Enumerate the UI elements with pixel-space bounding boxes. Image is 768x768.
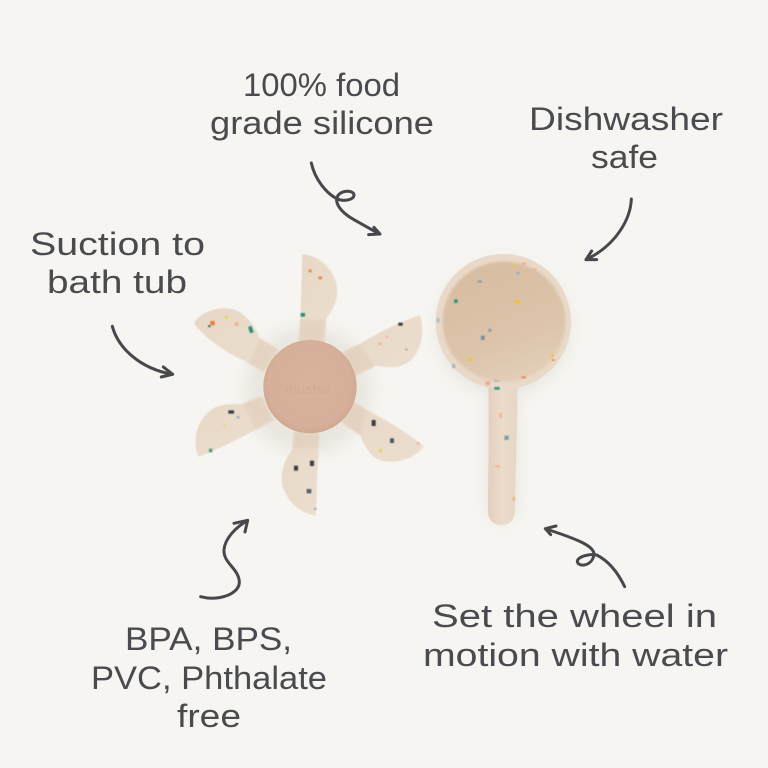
heading: Set the wheel in motion with water: Set the wheel in — [432, 598, 717, 634]
heading: Set the wheel in motion with water: motion with water — [423, 637, 728, 673]
scoop speckles — [437, 263, 555, 501]
scoop handle — [488, 387, 517, 525]
heading: 100% food grade silicone: 100% food — [243, 67, 400, 103]
heading: BPA, BPS, PVC, Phthalate free — [91, 621, 327, 734]
heading: BPA, BPS, PVC, Phthalate free: BPA, BPS, — [125, 621, 292, 657]
heading: Set the wheel in motion with water — [423, 598, 728, 673]
scoop shadow — [438, 263, 568, 520]
heading: 100% food grade silicone — [210, 67, 434, 141]
heading: Suction to bath tub: bath tub — [47, 264, 187, 300]
arrow: dishwasher safe — [586, 199, 631, 260]
flower hub — [263, 340, 357, 433]
scoop bowl inner — [443, 262, 565, 382]
heading: Dishwasher safe: safe — [591, 139, 658, 175]
flower shadow — [245, 327, 372, 453]
heading: Dishwasher safe — [529, 101, 723, 175]
heading: Suction to bath tub — [30, 226, 205, 300]
flower speckles — [208, 269, 420, 510]
arrow: food grade silicone — [311, 163, 380, 235]
heading: BPA, BPS, PVC, Phthalate free: PVC, Phthalate — [91, 660, 327, 696]
heading: 100% food grade silicone: grade silicone — [210, 105, 434, 141]
arrow: BPA free — [201, 520, 248, 598]
heading: Dishwasher safe: Dishwasher — [529, 101, 723, 137]
heading: BPA, BPS, PVC, Phthalate free: free — [177, 698, 241, 734]
product: flower wheel — [194, 254, 424, 515]
scoop bowl rim — [436, 254, 571, 389]
flower petals — [194, 254, 424, 515]
arrow: suction to bath tub — [112, 326, 173, 377]
hub logo: mushie — [286, 381, 331, 397]
flower arm shading — [243, 319, 375, 448]
arrow: set the wheel in motion — [545, 526, 625, 587]
heading: Suction to bath tub: Suction to — [30, 226, 205, 262]
product: scoop — [436, 254, 571, 525]
